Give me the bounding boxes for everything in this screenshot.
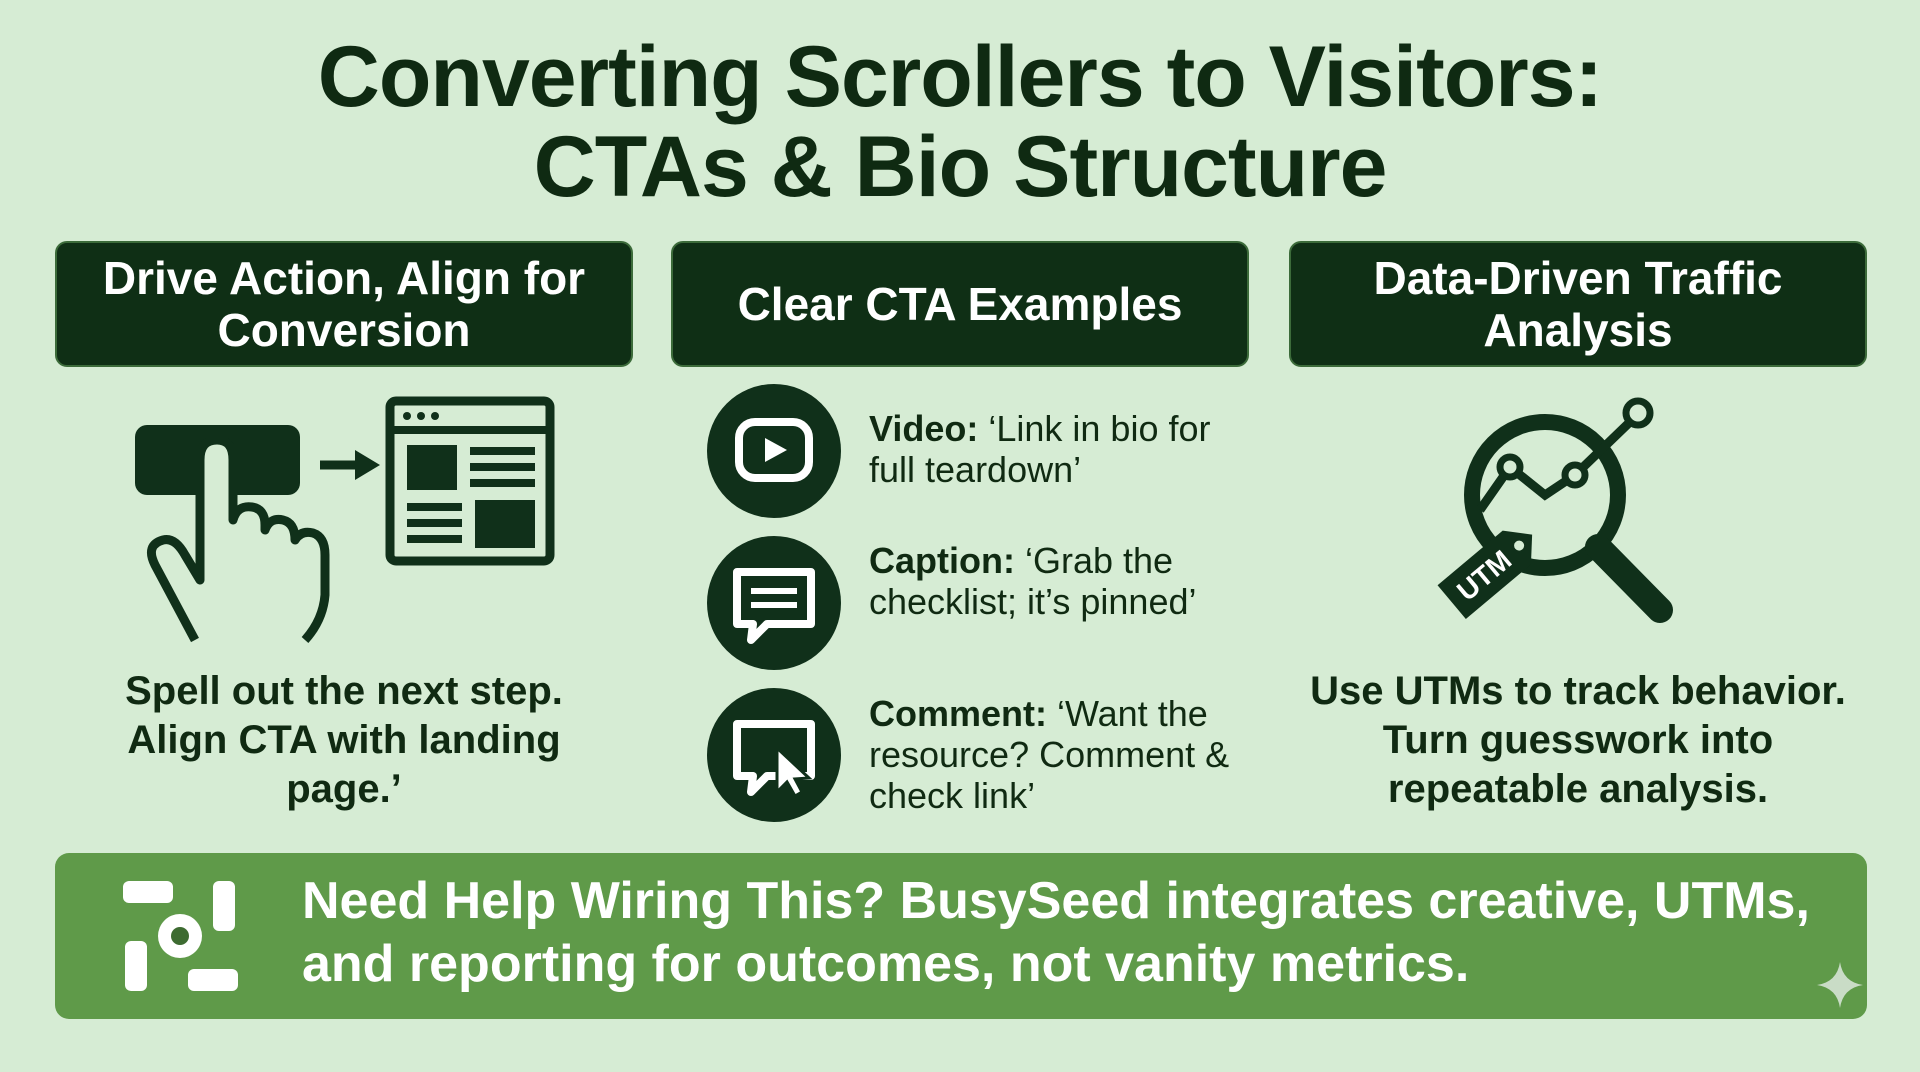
text: spell out: page.’ — [286, 767, 402, 811]
text: caption CTA — [869, 540, 1196, 622]
header: data-driven: Data-Driven Traffic — [1373, 252, 1782, 304]
text: caption CTA: checklist; it’s pinned’ — [869, 581, 1196, 622]
icon: sparkle — [1817, 962, 1863, 1008]
text: UTMs: repeatable analysis. — [1388, 767, 1768, 811]
icon: magnifier with UTM tag — [1438, 398, 1673, 623]
text: banner message: and reporting for outcomes, not vanity metrics. — [302, 935, 1469, 993]
text: UTMs: Use UTMs to track behavior. — [1310, 669, 1846, 713]
text: UTMs: Turn guesswork into — [1383, 718, 1773, 762]
text: comment CTA: resource? Comment & — [869, 734, 1229, 775]
text: spell out: Align CTA with landing — [127, 718, 561, 762]
text: banner message — [302, 872, 1810, 993]
text: video CTA: full teardown’ — [869, 449, 1081, 490]
text: caption CTA: Caption: ‘Grab the — [869, 540, 1173, 581]
icon: magnifier with UTM tag: UTM — [1451, 544, 1517, 607]
header: drive action — [55, 241, 633, 367]
text: spell out — [125, 669, 563, 811]
text: comment CTA: check link’ — [869, 775, 1035, 816]
text: video CTA — [869, 408, 1210, 490]
icon: hand click to landing page — [135, 396, 554, 643]
icon: video — [707, 384, 841, 518]
text: UTMs — [1310, 669, 1846, 811]
title: CTAs & Bio Structure — [534, 119, 1386, 215]
title: Converting Scrollers to Visitors: — [318, 29, 1602, 125]
text: banner message: Need Help Wiring This? BusySeed integrates creative, UTMs, — [302, 872, 1810, 930]
text: video CTA: Video: ‘Link in bio for — [869, 408, 1210, 449]
text: comment CTA: Comment: ‘Want the — [869, 693, 1208, 734]
icon: comment — [707, 688, 841, 822]
header: data-driven — [1289, 241, 1867, 367]
header: clear CTA examples: Clear CTA Examples — [738, 278, 1182, 330]
text: comment CTA — [869, 693, 1229, 816]
text: spell out: Spell out the next step. — [125, 669, 563, 713]
header: drive action: Conversion — [217, 304, 471, 356]
header: data-driven: Analysis — [1483, 304, 1673, 356]
header: clear CTA examples — [671, 241, 1249, 367]
banner — [55, 853, 1867, 1019]
header: drive action: Drive Action, Align for — [103, 252, 585, 304]
title — [318, 29, 1602, 215]
icon: caption — [707, 536, 841, 670]
icon: hands gear — [123, 881, 238, 991]
